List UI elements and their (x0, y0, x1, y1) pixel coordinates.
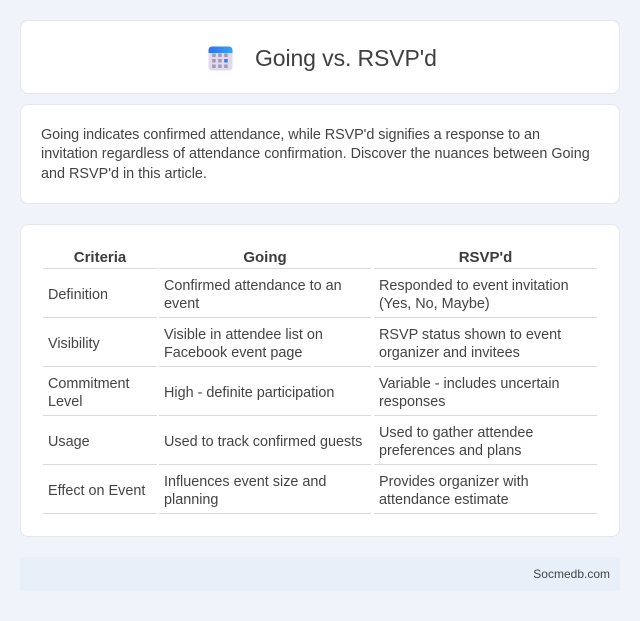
row: Commitment Level: Variable - includes uncertain (379, 376, 560, 392)
row: Usage: Used to gather attendee (379, 425, 533, 441)
row: Commitment Level: Commitment (48, 376, 130, 392)
row: Commitment Level: responses (379, 394, 445, 410)
row: Definition: Confirmed attendance to an (164, 278, 342, 294)
footer (20, 557, 620, 591)
panel: intro text: Going indicates confirmed attendance, while RSVP'd signifies a response to an (41, 127, 540, 143)
row: Visibility (48, 327, 562, 361)
row: Usage (48, 425, 533, 459)
row: Definition: event (164, 296, 199, 312)
row: Effect on Event: Provides organizer with (379, 474, 529, 490)
icon: calendar (208, 46, 232, 70)
panel: comparison table (20, 224, 620, 537)
row: Effect on Event (48, 474, 529, 508)
row: Visibility: organizer and invitees (379, 345, 520, 361)
table header: RSVP'd (459, 249, 512, 266)
row: Commitment Level: High - definite participation (164, 385, 334, 401)
row: Visibility: Visible in attendee list on (164, 327, 323, 343)
footer source text: Socmedb.com (533, 567, 610, 581)
row: Commitment Level: Level (48, 394, 82, 410)
panel: title header (20, 20, 620, 94)
panel: intro text: and RSVP'd in this article. (41, 166, 207, 182)
panel: intro text (20, 104, 620, 204)
row: Visibility: RSVP status shown to event (379, 327, 561, 343)
row: Definition: (Yes, No, Maybe) (379, 296, 490, 312)
row: Visibility: Visibility (48, 336, 100, 352)
title: Going vs. RSVP'd (255, 45, 437, 71)
table header: Criteria (74, 249, 126, 266)
row: Effect on Event: Effect on Event (48, 483, 145, 499)
row: Definition: Responded to event invitation (379, 278, 569, 294)
row: Effect on Event: attendance estimate (379, 492, 509, 508)
table header (74, 249, 512, 266)
row: Commitment Level (48, 376, 560, 410)
row: Usage: Used to track confirmed guests (164, 434, 362, 450)
row: Effect on Event: Influences event size and (164, 474, 326, 490)
row: Effect on Event: planning (164, 492, 218, 508)
table header: Going (243, 249, 287, 266)
panel: intro text: invitation regardless of attendance confirmation. Discover the nuances between Going (41, 146, 590, 162)
row: Definition: Definition (48, 287, 108, 303)
row: Usage: Usage (48, 434, 90, 450)
row: Definition (48, 278, 569, 312)
row: Visibility: Facebook event page (164, 345, 302, 361)
row: Usage: preferences and plans (379, 443, 521, 459)
